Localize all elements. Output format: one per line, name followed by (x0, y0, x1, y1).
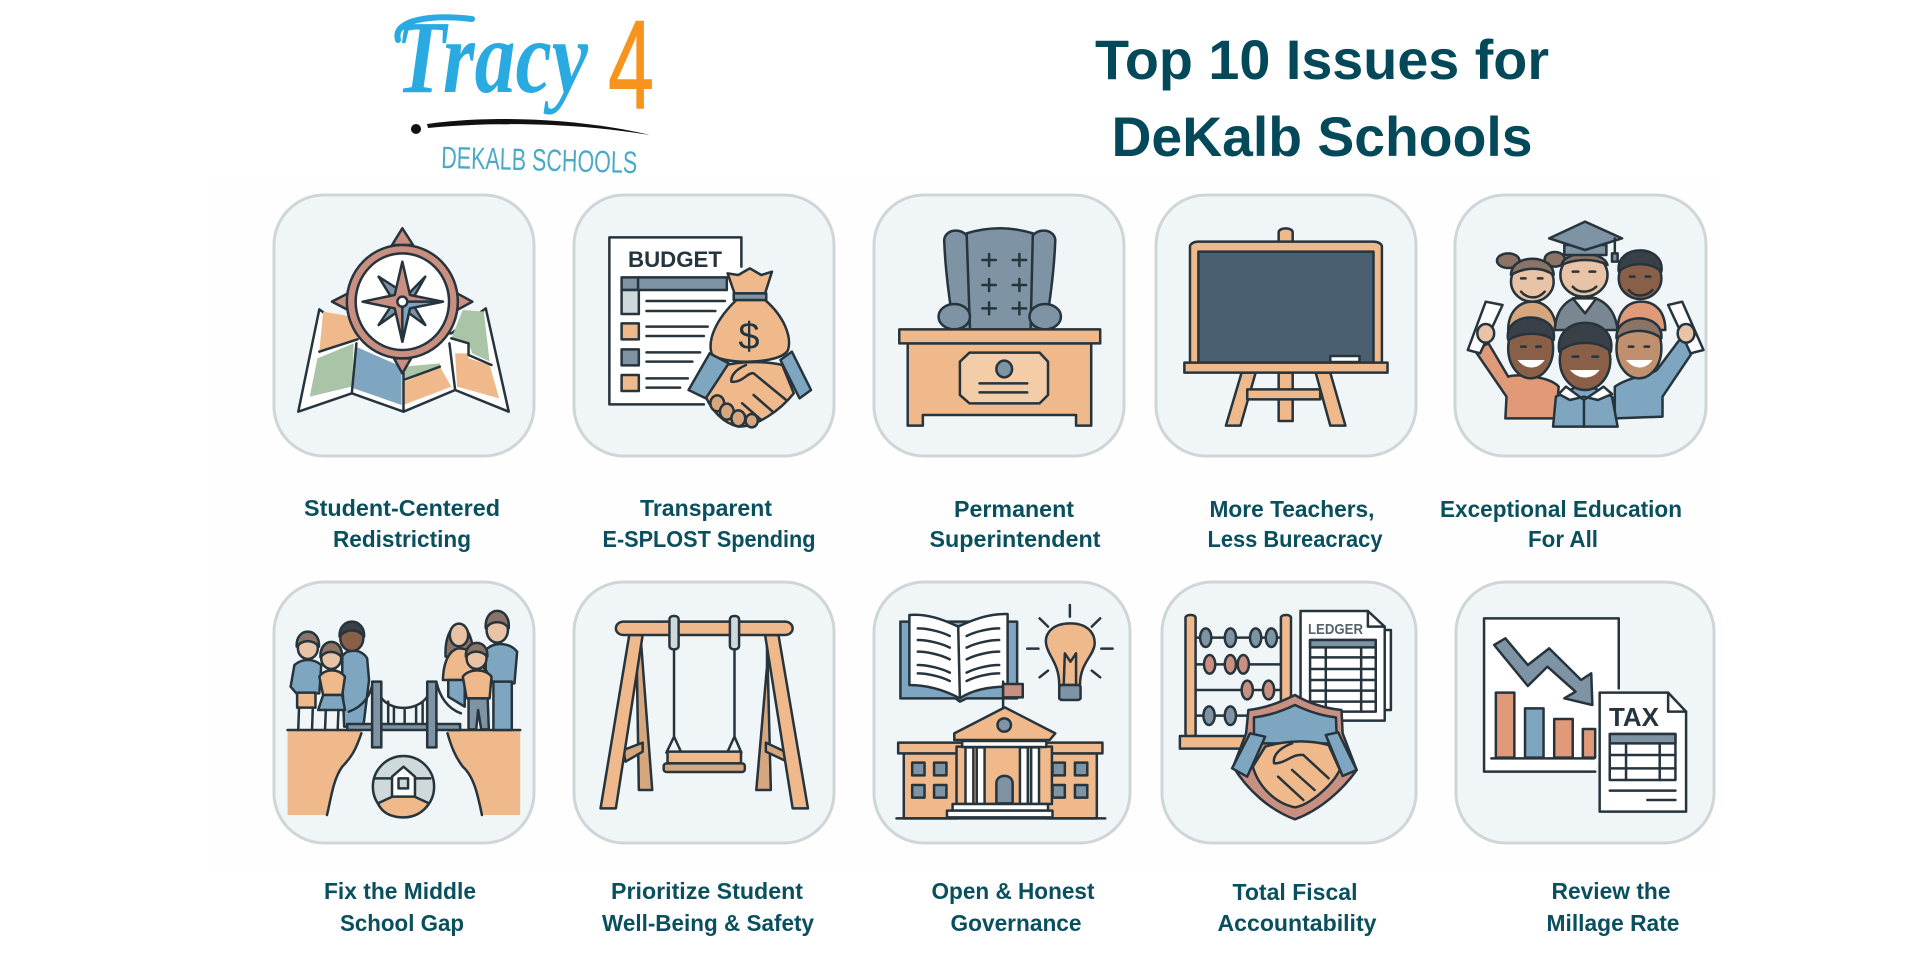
icon: swing set (601, 616, 808, 808)
icon: book, light bulb and school building (896, 605, 1113, 818)
label: Total Fiscal (1232, 879, 1358, 905)
label (602, 495, 816, 552)
logo subtitle: DEKALB SCHOOLS (441, 140, 638, 180)
icon: abacus, ledger and handshake shield (1180, 611, 1391, 819)
label: Student-Centered (304, 495, 500, 521)
icon: abacus, ledger and handshake shield: LEDGER (1308, 621, 1363, 638)
label (930, 496, 1101, 552)
label: E-SPLOST Spending (602, 526, 816, 552)
panel: Transparent E-SPLOST Spending (574, 195, 834, 552)
label: Fix the Middle (324, 878, 476, 904)
logo script word Tracy: Tracy (396, 0, 589, 115)
label: School Gap (340, 910, 464, 936)
label: Permanent (954, 496, 1074, 522)
icon: falling chart and tax form: TAX (1609, 702, 1660, 732)
panel: Exceptional Education For All (1440, 195, 1706, 552)
label (324, 878, 476, 936)
logo swoosh (411, 119, 650, 135)
label (1218, 879, 1377, 936)
label (932, 878, 1095, 936)
label: Review the (1552, 878, 1670, 904)
label (1440, 496, 1682, 552)
label: More Teachers, (1210, 496, 1374, 522)
label: Exceptional Education (1440, 496, 1682, 522)
title: Top 10 Issues for (1095, 28, 1549, 91)
panel: Student-Centered Redistricting (274, 195, 534, 552)
panel: Open & Honest Governance (874, 582, 1130, 936)
label (602, 878, 814, 936)
label: For All (1528, 526, 1598, 552)
label: Millage Rate (1546, 910, 1680, 936)
label: Redistricting (333, 526, 471, 552)
title (1095, 28, 1549, 168)
title: DeKalb Schools (1112, 105, 1532, 168)
icon: budget sheet, money bag and handshake (609, 237, 811, 427)
logo: Tracy 4 DeKalb Schools (396, 0, 654, 180)
panel: Total Fiscal Accountability (1162, 582, 1416, 936)
icon: budget sheet, money bag and handshake: BUDGET (628, 247, 723, 272)
panel: Fix the Middle School Gap (274, 582, 534, 936)
label: Less Bureacracy (1208, 526, 1383, 552)
label: Superintendent (930, 526, 1101, 552)
panel: Review the Millage Rate (1456, 582, 1714, 936)
label: Well-Being & Safety (602, 910, 814, 936)
icon: budget sheet, money bag and handshake: $ (738, 316, 760, 358)
panel: More Teachers, Less Bureacracy (1156, 195, 1416, 552)
label (1546, 878, 1680, 936)
label (304, 495, 500, 552)
icon: cheering students with graduate (1468, 222, 1703, 427)
label: Open & Honest (932, 878, 1095, 904)
icon: falling chart and tax form (1484, 618, 1686, 812)
icon: families and bridge over gap (288, 611, 520, 817)
label: Transparent (640, 495, 772, 521)
label: Governance (950, 910, 1082, 936)
panel: Permanent Superintendent (874, 195, 1124, 552)
label: Prioritize Student (611, 878, 803, 904)
label (1208, 496, 1383, 552)
icon: superintendent chair and desk (899, 228, 1100, 426)
panel: Prioritize Student Well-Being & Safety (574, 582, 834, 936)
icon: chalkboard on easel (1184, 228, 1388, 426)
icon: map with compass (298, 228, 509, 412)
label: Accountability (1218, 910, 1377, 936)
